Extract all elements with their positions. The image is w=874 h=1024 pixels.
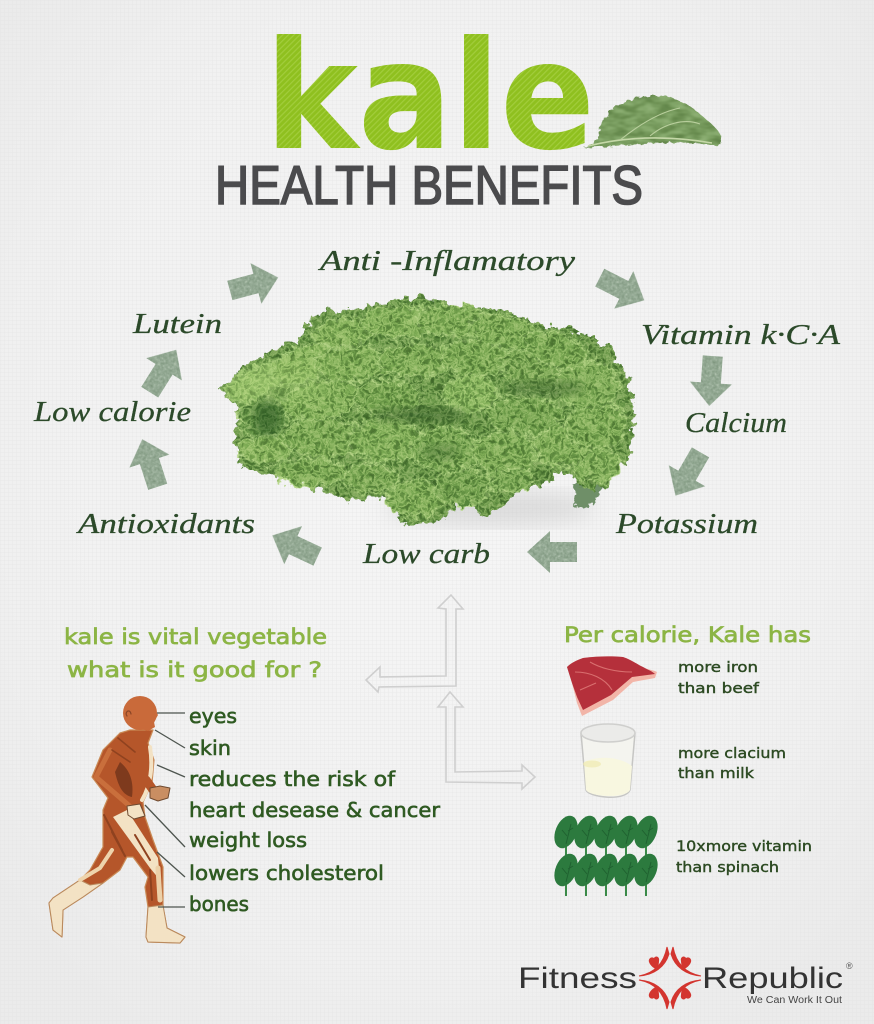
- arrow: to Potassium: [657, 442, 719, 506]
- arrow: to Lutein: [132, 339, 194, 403]
- subtitle: health benefits: HEALTH BENEFITS: [215, 154, 643, 216]
- text: more iron than beef: more iron: [678, 660, 758, 676]
- logo: Fitness Republic: [518, 947, 853, 1009]
- icon: steak: [567, 656, 657, 716]
- central kale image: [221, 297, 635, 526]
- icon: spinach leaves: [550, 812, 662, 896]
- list: what kale is good for: eyes: [189, 704, 237, 728]
- icon: running man anatomy: [49, 696, 185, 943]
- text: more calcium than milk: more clacium: [678, 746, 786, 762]
- benefit label: Lutein: Lutein: [132, 308, 222, 340]
- heading: kale is vital vegetable: what is it good for ?: [67, 658, 322, 682]
- heading: kale is vital vegetable: kale is vital vegetable: [64, 625, 327, 649]
- logo: Fitness Republic: Fitness: [518, 962, 637, 995]
- benefit label: Antioxidants: Antioxidants: [76, 508, 255, 540]
- arrow: to Vitamin: [590, 259, 654, 319]
- outline arrow: up and left: [366, 595, 463, 692]
- arrow: to Low carb: [527, 531, 577, 573]
- icon: kale leaf: [584, 95, 722, 148]
- arrow: to Anti-Inflamatory: [224, 257, 284, 311]
- benefit label: Vitamin k-C-A: Vitamin k·C·A: [641, 319, 840, 351]
- outline arrow: up and right: [438, 692, 535, 789]
- heading: kale is vital vegetable: [64, 625, 327, 682]
- benefit label: Low calorie: Low calorie: [33, 396, 191, 428]
- arrow: to Calcium: [688, 355, 734, 407]
- list: what kale is good for: bones: [189, 892, 249, 916]
- title: kale: kale: [265, 10, 595, 184]
- text: more iron than beef: than beef: [678, 681, 760, 697]
- logo mark: [639, 947, 701, 1009]
- list: what kale is good for: lowers cholesterol: [189, 861, 384, 885]
- text: 10x more vitamin than spinach: [676, 839, 812, 876]
- list: what kale is good for: weight loss: [189, 828, 307, 852]
- logo: Fitness Republic: Republic: [702, 962, 843, 995]
- arrow: to Antioxidants: [263, 516, 327, 576]
- text: more calcium than milk: than milk: [678, 766, 755, 782]
- list: what kale is good for: reduces the risk of: [189, 767, 396, 791]
- logo: Fitness Republic: ®: [846, 961, 853, 971]
- text: 10x more vitamin than spinach: than spinach: [676, 860, 779, 876]
- text: 10x more vitamin than spinach: 10xmore vitamin: [676, 839, 812, 855]
- heading: per calorie, kale has: Per calorie, Kale has: [564, 623, 811, 647]
- logo: Fitness Republic: We Can Work It Out: [747, 995, 842, 1006]
- icon: glass of milk: [581, 724, 635, 797]
- connector lines from body to labels: [145, 713, 185, 907]
- benefit label: Low carb: Low carb: [362, 538, 490, 570]
- text: more iron than beef: [678, 660, 760, 697]
- list: what kale is good for: [189, 704, 441, 916]
- benefit label: Anti-Inflamatory: Anti -Inflamatory: [317, 245, 575, 277]
- benefit label: Calcium: Calcium: [685, 407, 787, 439]
- arrow: to Low calorie: [122, 433, 178, 493]
- benefit label: Potassium: Potassium: [615, 508, 758, 540]
- text: more calcium than milk: [678, 746, 786, 782]
- list: what kale is good for: heart desease & cancer: [189, 798, 441, 822]
- list: what kale is good for: skin: [189, 736, 231, 760]
